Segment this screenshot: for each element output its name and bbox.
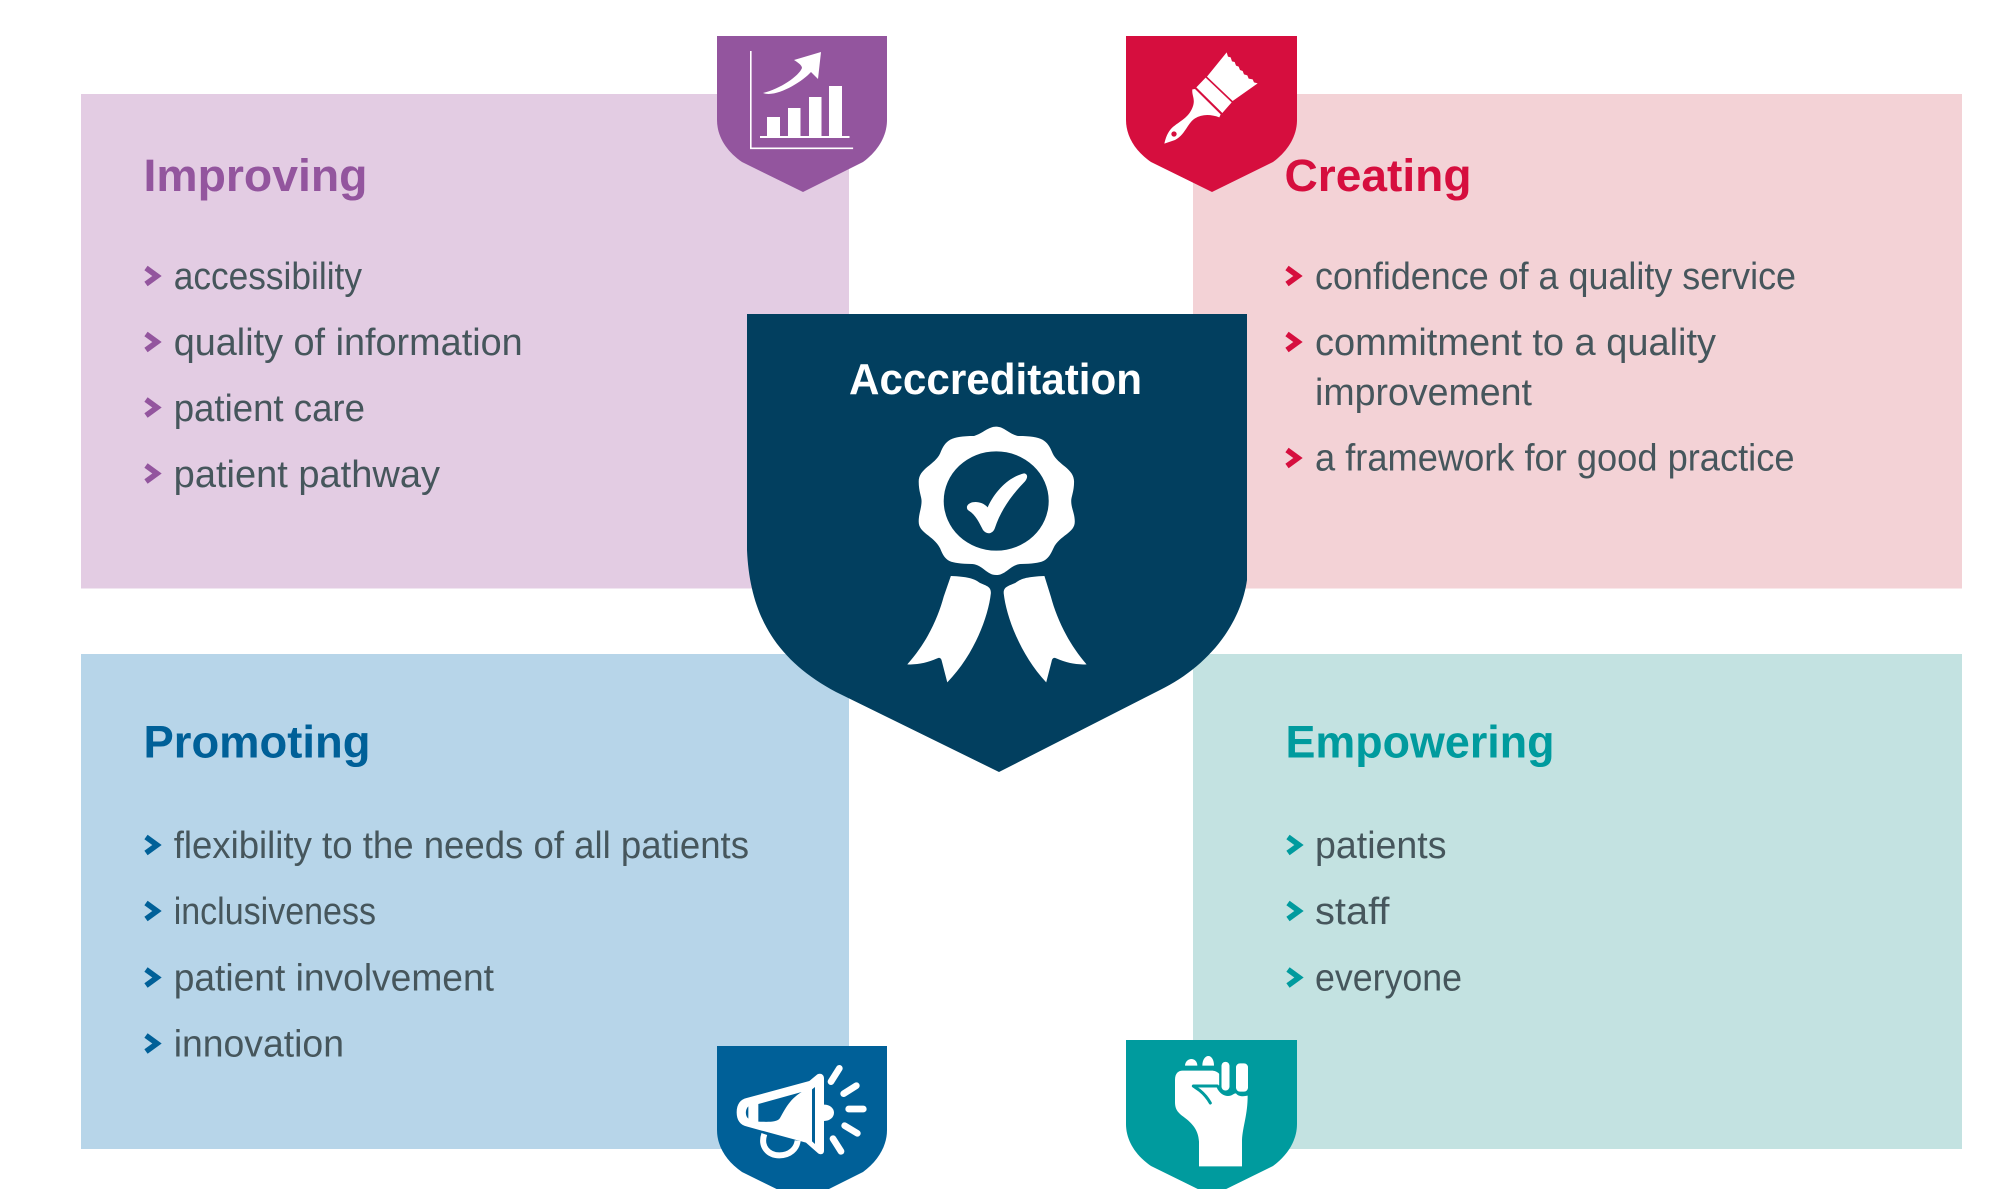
list item: patient pathway: patient pathway <box>174 454 440 496</box>
heading: accreditation: Acccreditation <box>849 355 1142 404</box>
list item: a framework for good practice: a framework for good practice <box>1315 438 1794 480</box>
list item: staff <box>1288 891 1390 933</box>
panel: improving <box>81 94 849 588</box>
panel: empowering <box>1193 654 1962 1149</box>
icon: teal shield with raised fist <box>1126 1040 1297 1189</box>
list item: quality of information: quality of information <box>174 322 523 364</box>
icon: red shield with paintbrush <box>1126 36 1297 192</box>
icon: purple shield with bar chart <box>717 36 887 192</box>
icon: blue shield with megaphone <box>717 1046 887 1189</box>
panel background: improving <box>81 94 849 588</box>
shield background <box>747 314 1247 772</box>
list item: confidence of a quality service: confidence of a quality service <box>1315 256 1796 298</box>
list item: patient involvement: patient involvement <box>174 958 494 1000</box>
heading: improving: Improving <box>144 150 368 201</box>
panel background: promoting <box>81 654 849 1149</box>
list item: patients: patients <box>1315 825 1446 867</box>
icon: rosette with check mark <box>907 427 1087 682</box>
heading: promoting: Promoting <box>144 716 370 768</box>
list item: commitment to a quality improvement: commitment to a quality <box>1315 322 1716 364</box>
list item: everyone: everyone <box>1315 958 1462 1000</box>
central shield: accreditation <box>747 314 1247 772</box>
list item: inclusiveness: inclusiveness <box>174 891 376 933</box>
panel background: empowering <box>1193 654 1962 1149</box>
panel background: creating <box>1193 94 1962 588</box>
list item: patient care: patient care <box>174 388 365 430</box>
list item: commitment to a quality improvement <box>1287 322 1716 414</box>
heading: empowering: Empowering <box>1286 716 1554 768</box>
list item: accessibility: accessibility <box>174 256 362 298</box>
list item: flexibility: flexibility to the needs of all patients <box>174 825 749 867</box>
panel: promoting <box>81 654 849 1149</box>
panel: creating <box>1193 94 1962 588</box>
heading: creating: Creating <box>1284 150 1472 201</box>
list item: commitment to a quality improvement: improvement <box>1315 372 1532 414</box>
list item: innovation: innovation <box>174 1024 344 1066</box>
list item: staff: staff <box>1315 891 1390 933</box>
